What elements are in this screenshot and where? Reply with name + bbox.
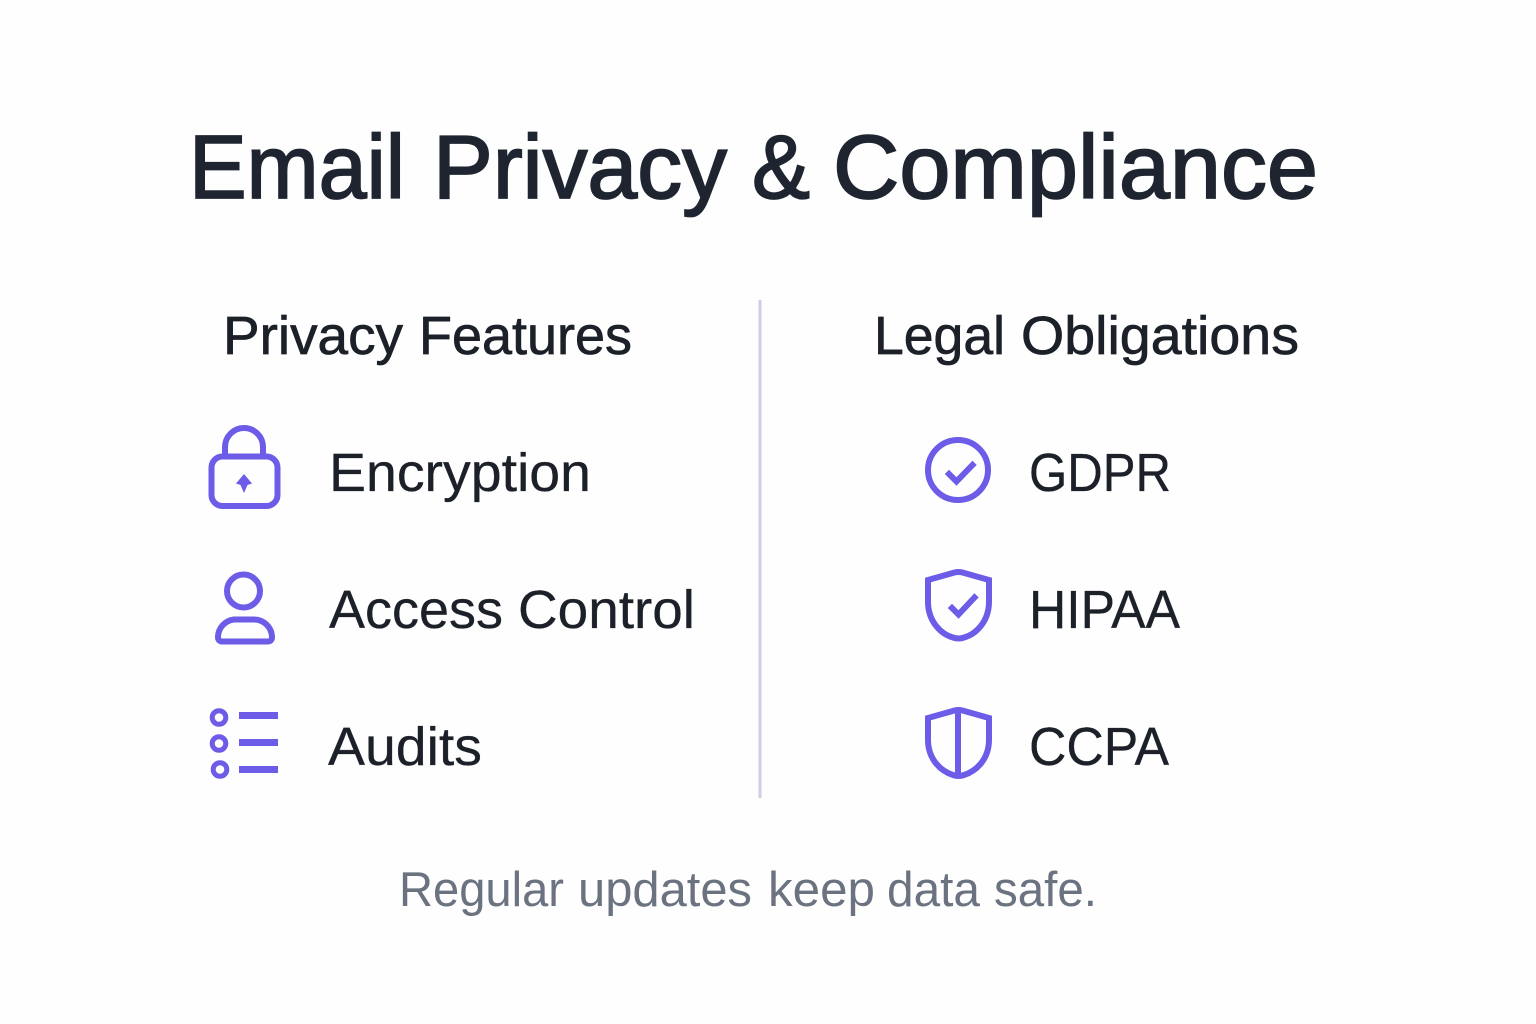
divider bbox=[758, 300, 762, 798]
icon: check circle bbox=[928, 440, 988, 500]
title: Compliance bbox=[833, 118, 1318, 218]
footer note: safe. bbox=[994, 863, 1097, 917]
label: encryption: Encryption bbox=[329, 443, 591, 503]
label: CCPA: CCPA bbox=[1029, 717, 1169, 777]
title: & bbox=[752, 118, 810, 218]
icon: lock bbox=[212, 428, 278, 506]
label: access control bbox=[329, 580, 695, 640]
label: access control: Access bbox=[329, 580, 503, 640]
icon: split shield bbox=[928, 710, 989, 776]
label: HIPAA: HIPAA bbox=[1029, 580, 1180, 640]
heading: legal obligations: Obligations bbox=[1021, 306, 1299, 366]
title: Privacy bbox=[433, 118, 727, 218]
icon: shield with check bbox=[928, 572, 989, 638]
footer note bbox=[399, 863, 1097, 917]
label: access control: Control bbox=[518, 580, 695, 640]
title bbox=[189, 118, 1318, 218]
footer note: updates bbox=[578, 863, 752, 917]
heading: legal obligations: Legal bbox=[874, 306, 1005, 366]
footer note: Regular bbox=[399, 863, 564, 917]
footer note: data bbox=[887, 863, 981, 917]
title: Email bbox=[189, 118, 405, 218]
icon: person bbox=[218, 574, 272, 642]
label: GDPR: GDPR bbox=[1029, 443, 1171, 503]
heading: privacy features: Features bbox=[419, 306, 632, 366]
heading: legal obligations bbox=[874, 306, 1299, 366]
panel: privacy features bbox=[212, 306, 695, 777]
panel: legal obligations bbox=[874, 306, 1299, 777]
label: audits: Audits bbox=[328, 717, 482, 777]
heading: privacy features bbox=[223, 306, 632, 366]
heading: privacy features: Privacy bbox=[223, 306, 403, 366]
footer note: keep bbox=[768, 863, 875, 917]
icon: checklist bbox=[212, 711, 278, 776]
